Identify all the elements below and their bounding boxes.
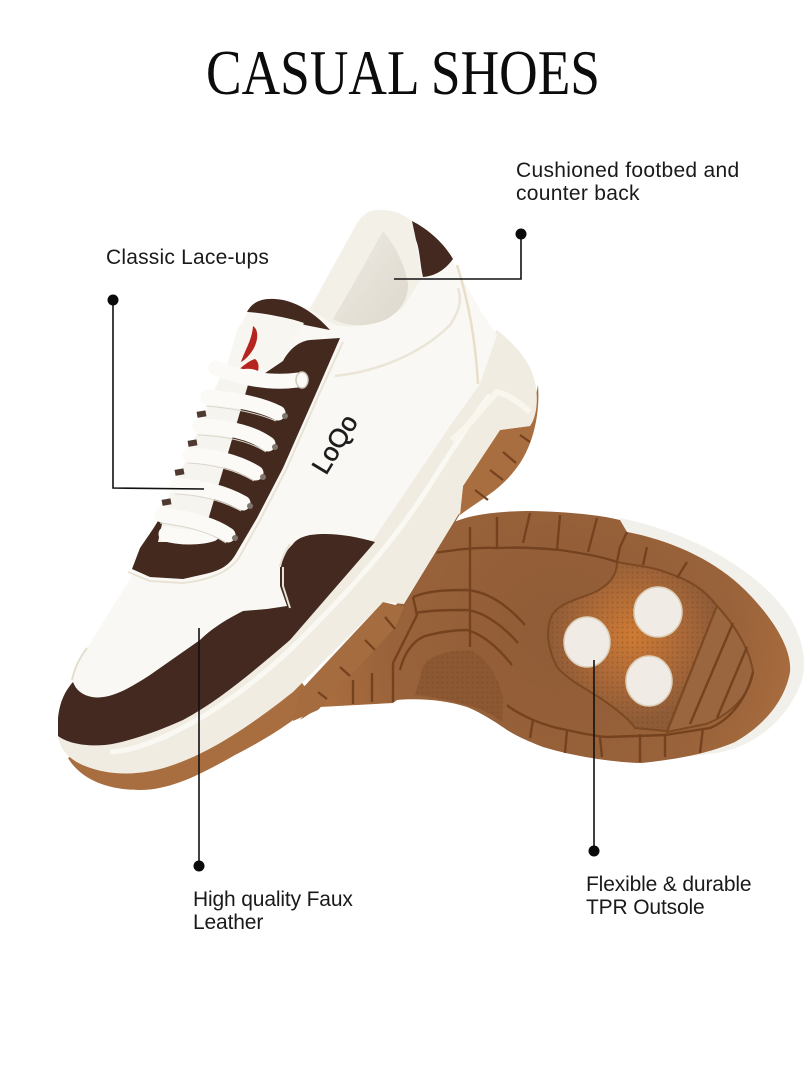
label: outsole xyxy=(586,873,751,919)
callout lines xyxy=(113,234,594,866)
label: footbed: counter back xyxy=(516,182,640,205)
top-view shoe xyxy=(58,210,538,790)
collar stitch xyxy=(335,288,460,376)
lug lines xyxy=(318,435,530,699)
label: faux leather: Leather xyxy=(193,911,263,934)
stripe panel xyxy=(667,606,753,732)
saddle seam xyxy=(280,544,290,608)
gum heel xyxy=(460,385,538,515)
label: outsole: Flexible & durable xyxy=(586,873,751,896)
disc: upper xyxy=(634,587,682,637)
tongue top brown xyxy=(247,299,330,330)
tongue logo xyxy=(237,326,259,371)
gum outsole xyxy=(300,511,790,763)
disc: lower xyxy=(626,656,672,706)
label: faux leather: High quality Faux xyxy=(193,888,353,911)
laces xyxy=(162,368,298,537)
disc: left xyxy=(564,617,610,667)
side logo: LoQo xyxy=(305,409,364,479)
lace loop xyxy=(296,372,308,388)
pod area xyxy=(548,562,717,731)
callout dots xyxy=(108,228,600,872)
toe seam xyxy=(72,648,87,680)
textured heel patch xyxy=(415,650,503,722)
eyelets xyxy=(232,413,288,541)
midsole xyxy=(58,330,537,774)
lace shadows xyxy=(160,406,276,543)
gum toe strip xyxy=(68,680,320,790)
heel tab xyxy=(412,221,453,277)
midsole highlight xyxy=(110,395,490,752)
upper white xyxy=(60,210,497,738)
label: lace-ups: Classic Lace-ups xyxy=(106,246,269,269)
label: footbed xyxy=(516,159,739,205)
white rim xyxy=(620,518,804,762)
tongue xyxy=(227,313,304,370)
tongue under laces xyxy=(158,372,250,542)
tread lines xyxy=(353,513,753,762)
eyestay xyxy=(132,338,340,579)
gum front lugs xyxy=(293,602,404,721)
label: faux leather xyxy=(193,888,353,934)
toe saddle xyxy=(58,534,375,745)
dark gaps xyxy=(162,410,206,506)
heel stitch xyxy=(457,265,478,384)
label: footbed: Cushioned footbed and xyxy=(516,159,739,182)
heel ridge xyxy=(452,392,530,440)
sole-view shoe xyxy=(300,511,804,763)
collar lining xyxy=(333,231,408,325)
title: CASUAL SHOES xyxy=(206,37,600,108)
label: outsole: TPR Outsole xyxy=(586,896,705,919)
eyestay seam xyxy=(128,342,343,583)
collar rim xyxy=(310,210,422,326)
